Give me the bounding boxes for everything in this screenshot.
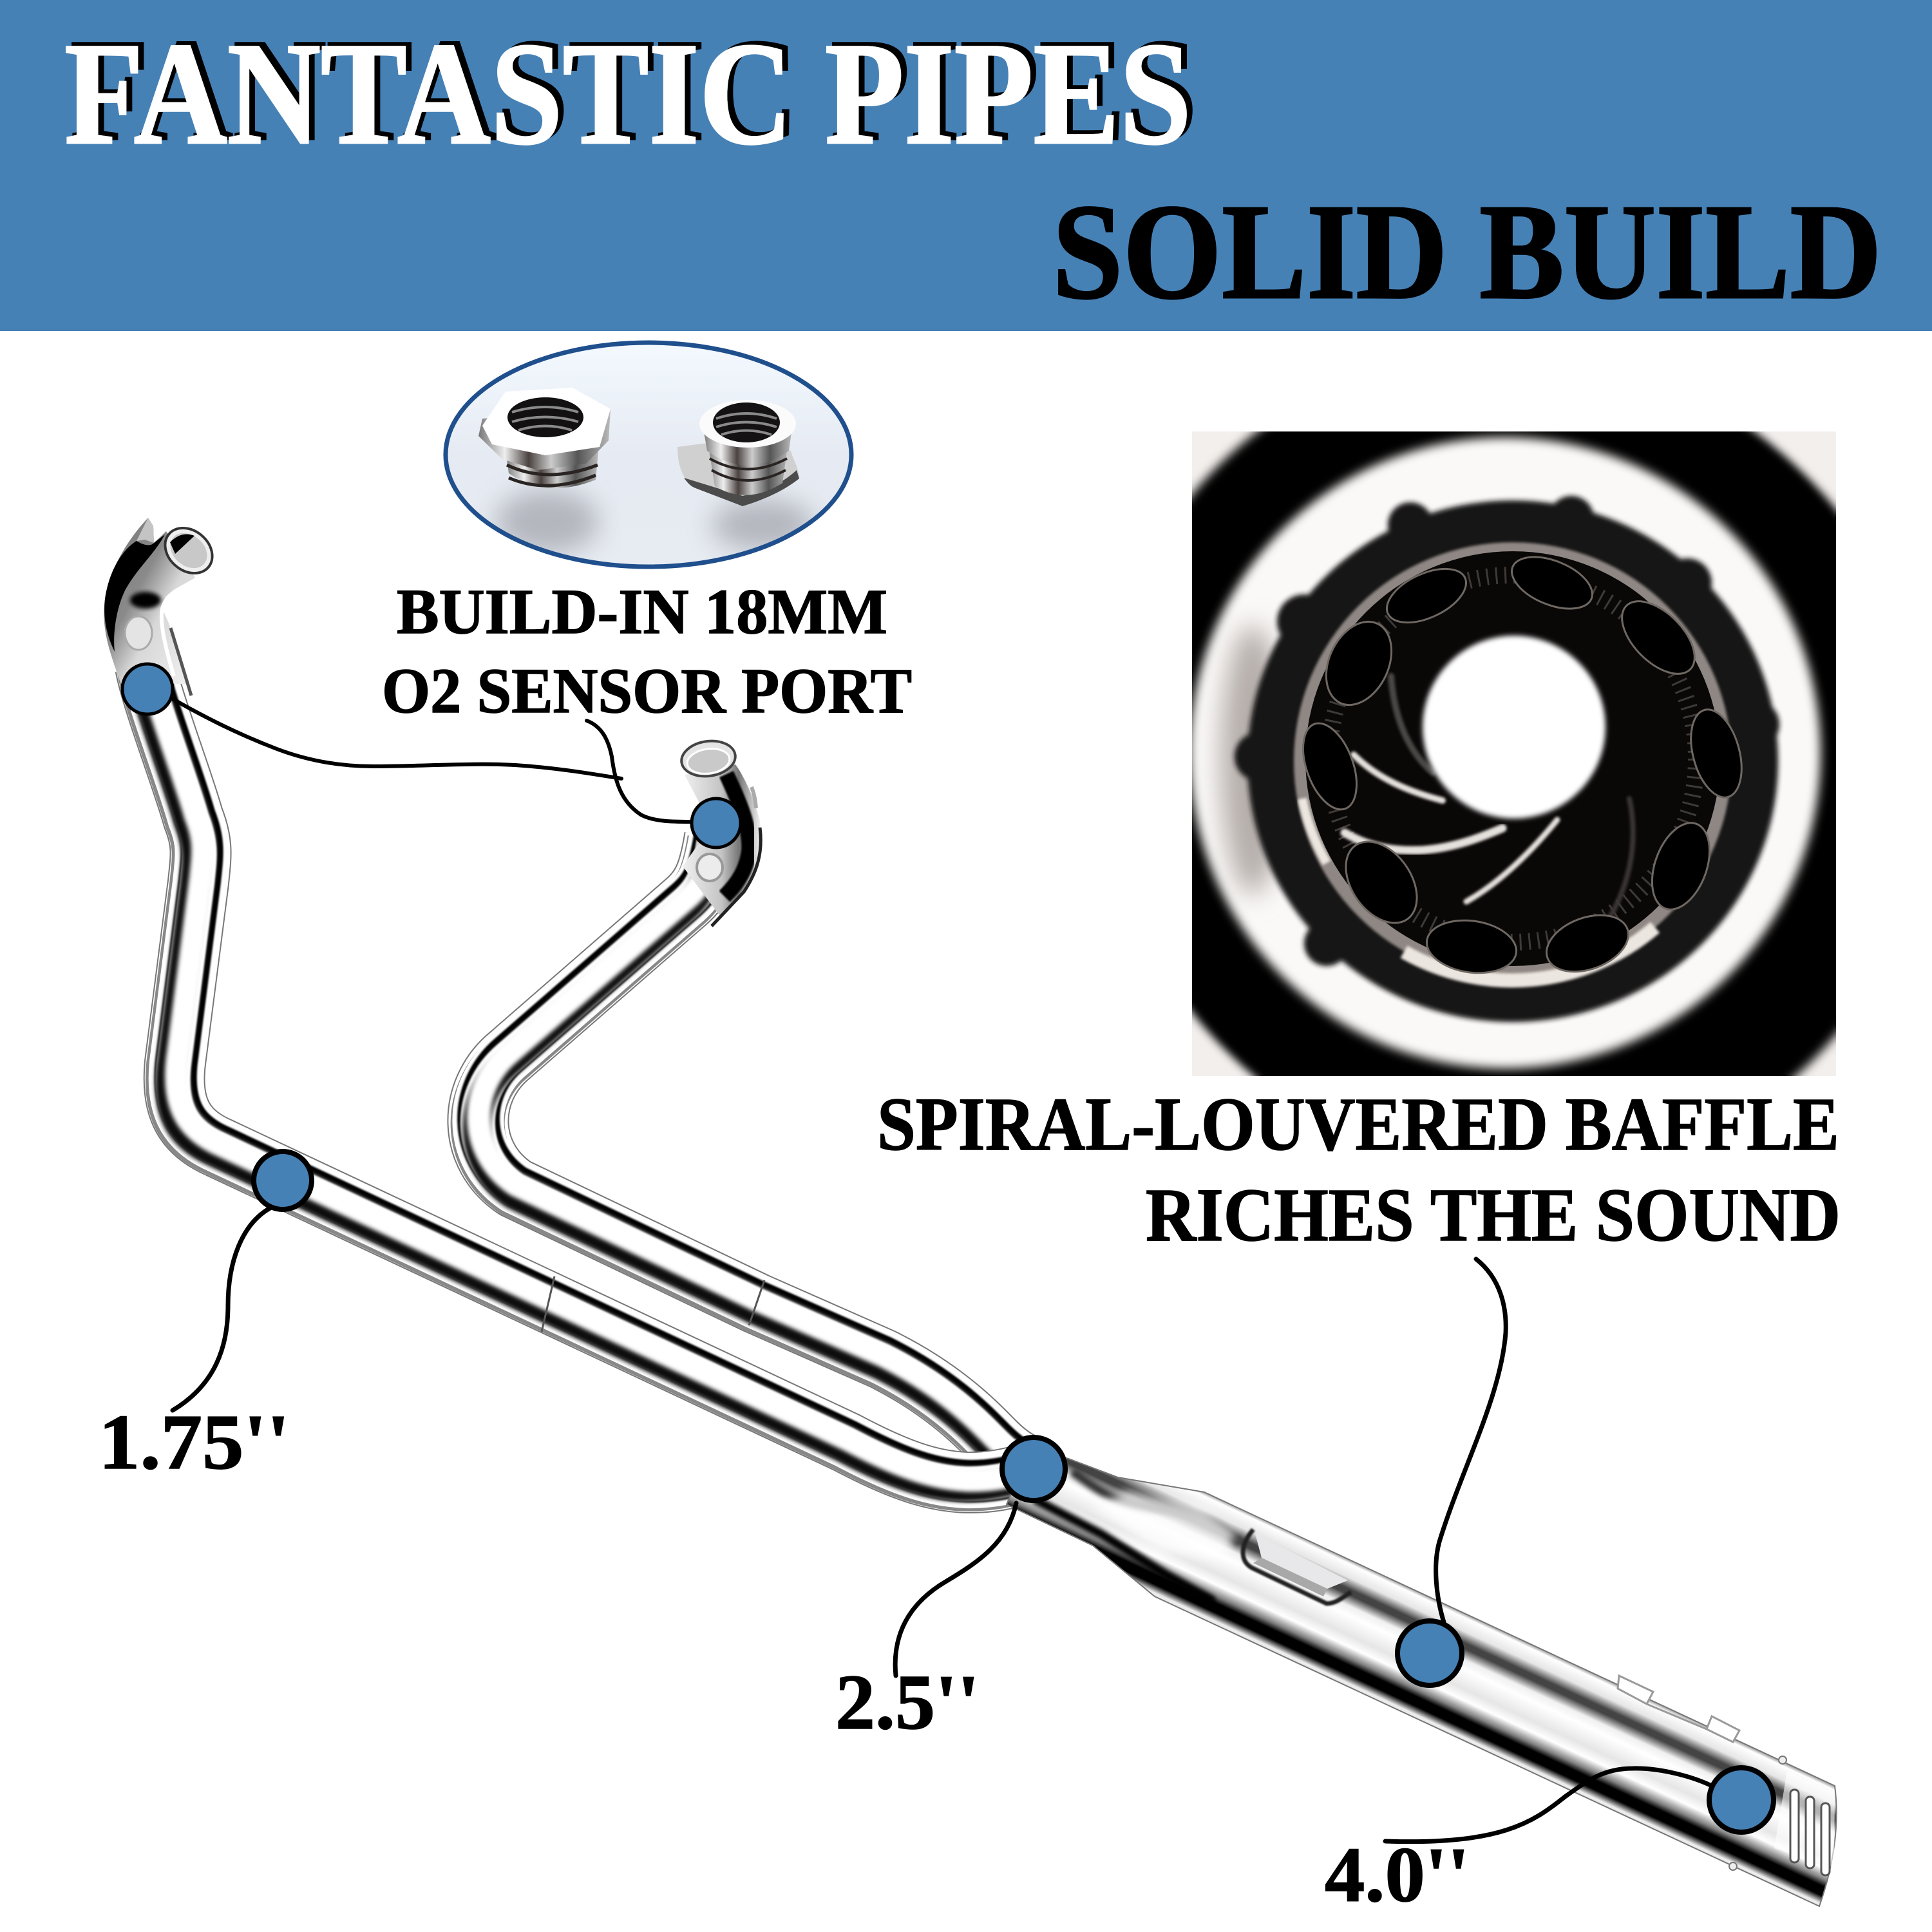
muffler slot (1243, 1530, 1351, 1604)
leader lines (170, 697, 1712, 1842)
label: spiral baffle: RICHES THE SOUND (1146, 1173, 1841, 1257)
bright center opening (1423, 636, 1605, 819)
right header pipe (477, 833, 1037, 1476)
photo: spiral louvered baffle (1192, 431, 1836, 1076)
dot: baffle (1397, 1621, 1462, 1685)
label: spiral baffle (877, 1082, 1841, 1257)
leader: 4.0 (1385, 1768, 1712, 1842)
outer black ring (1192, 431, 1836, 1076)
marker dots (122, 664, 1774, 1832)
label: O2 sensor port: BUILD-IN 18MM (397, 576, 887, 647)
header banner (0, 0, 1932, 331)
dot: 2.5 collector (1002, 1437, 1065, 1501)
title: fantastic pipes: FANTASTIC PIPES (64, 13, 1191, 175)
size label: 4.0: 4.0'' (1325, 1832, 1470, 1918)
label: O2 sensor port: O2 SENSOR PORT (382, 655, 912, 726)
left pipe flange (104, 518, 222, 696)
photo: O2 sensor bungs in oval (443, 341, 851, 568)
tail cap and slots (1729, 1756, 1835, 1875)
dot: 4.0 tip (1709, 1768, 1774, 1832)
leader: baffle (1436, 1259, 1506, 1622)
dot: 1.75 pipe (254, 1151, 312, 1209)
label: spiral baffle: SPIRAL-LOUVERED BAFFLE (877, 1082, 1839, 1166)
leader: left port to label (170, 697, 621, 779)
light ring (1189, 437, 1821, 1068)
subtitle: solid build: SOLID BUILD (1052, 176, 1882, 327)
leader: right port to label (587, 721, 690, 822)
leader: 1.75 (173, 1208, 271, 1410)
scalloped dark ring (1235, 496, 1779, 1022)
mounting clips (1618, 1676, 1739, 1742)
dot: right header port (692, 799, 741, 848)
right pipe flange (679, 737, 761, 926)
thin inner light ring (1294, 542, 1732, 980)
muffler neck shading (1072, 1472, 1240, 1542)
exhaust pipes (140, 664, 1039, 1488)
leader: 2.5 (895, 1503, 1016, 1676)
pipe seams (542, 1276, 764, 1332)
size label: 2.5: 2.5'' (835, 1659, 980, 1746)
baffle interior (1293, 547, 1750, 982)
left header pipe (140, 664, 1039, 1488)
dot: left header port (122, 664, 173, 714)
label: O2 sensor port (382, 576, 912, 726)
muffler (1007, 1449, 1837, 1906)
size label: 1.75: 1.75'' (99, 1399, 290, 1486)
